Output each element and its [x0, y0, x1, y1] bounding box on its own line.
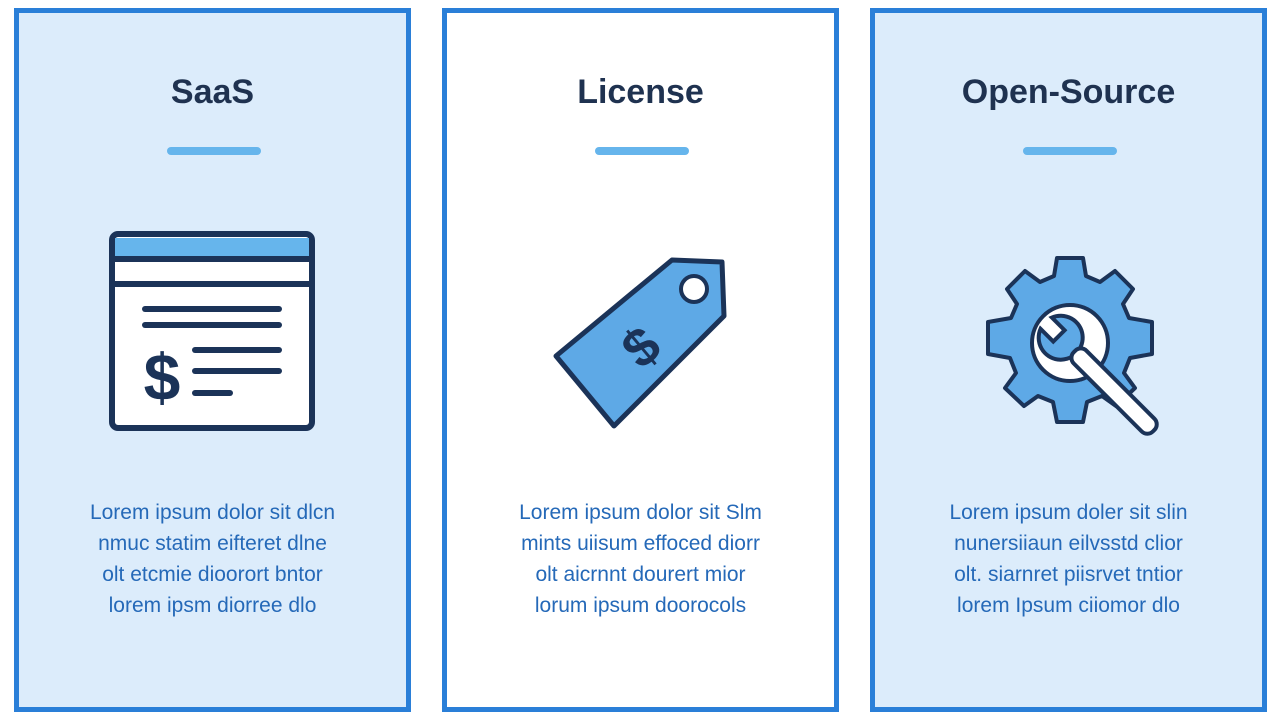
text block: lorum ipsum doorocols [535, 594, 746, 617]
text block: olt. siarnret piisrvet tntior [954, 563, 1183, 586]
icon: billing window: $ [144, 340, 180, 414]
icon: billing window [109, 231, 315, 431]
panel: SaaS [14, 8, 411, 712]
heading: License: License [577, 73, 704, 111]
panel: License [442, 8, 839, 712]
icon: price tag [554, 258, 726, 428]
heading: Open-Source: Open-Source [962, 73, 1175, 111]
text block: Lorem ipsum dolor sit Slm [519, 501, 762, 524]
icon: gear with wrench [986, 256, 1159, 436]
text block [90, 501, 335, 617]
text block: nunersiiaun eilvsstd clior [954, 532, 1183, 555]
heading: SaaS: SaaS [171, 73, 254, 111]
text block: Lorem ipsum dolor sit dlcn [90, 501, 335, 524]
text block: olt aicrnnt dourert mior [535, 563, 746, 586]
icon: price tag: $ [610, 315, 672, 380]
text block: Lorem ipsum doler sit slin [949, 501, 1188, 524]
text block [519, 501, 762, 617]
text block [949, 501, 1188, 617]
text block: lorem ipsm diorree dlo [109, 594, 316, 617]
text block: lorem Ipsum ciiomor dlo [957, 594, 1180, 617]
text block: mints uiisum effoced diorr [521, 532, 760, 555]
text block: nmuc statim eifteret dlne [98, 532, 327, 555]
text block: olt etcmie dioorort bntor [102, 563, 323, 586]
panel: Open-Source [870, 8, 1267, 712]
